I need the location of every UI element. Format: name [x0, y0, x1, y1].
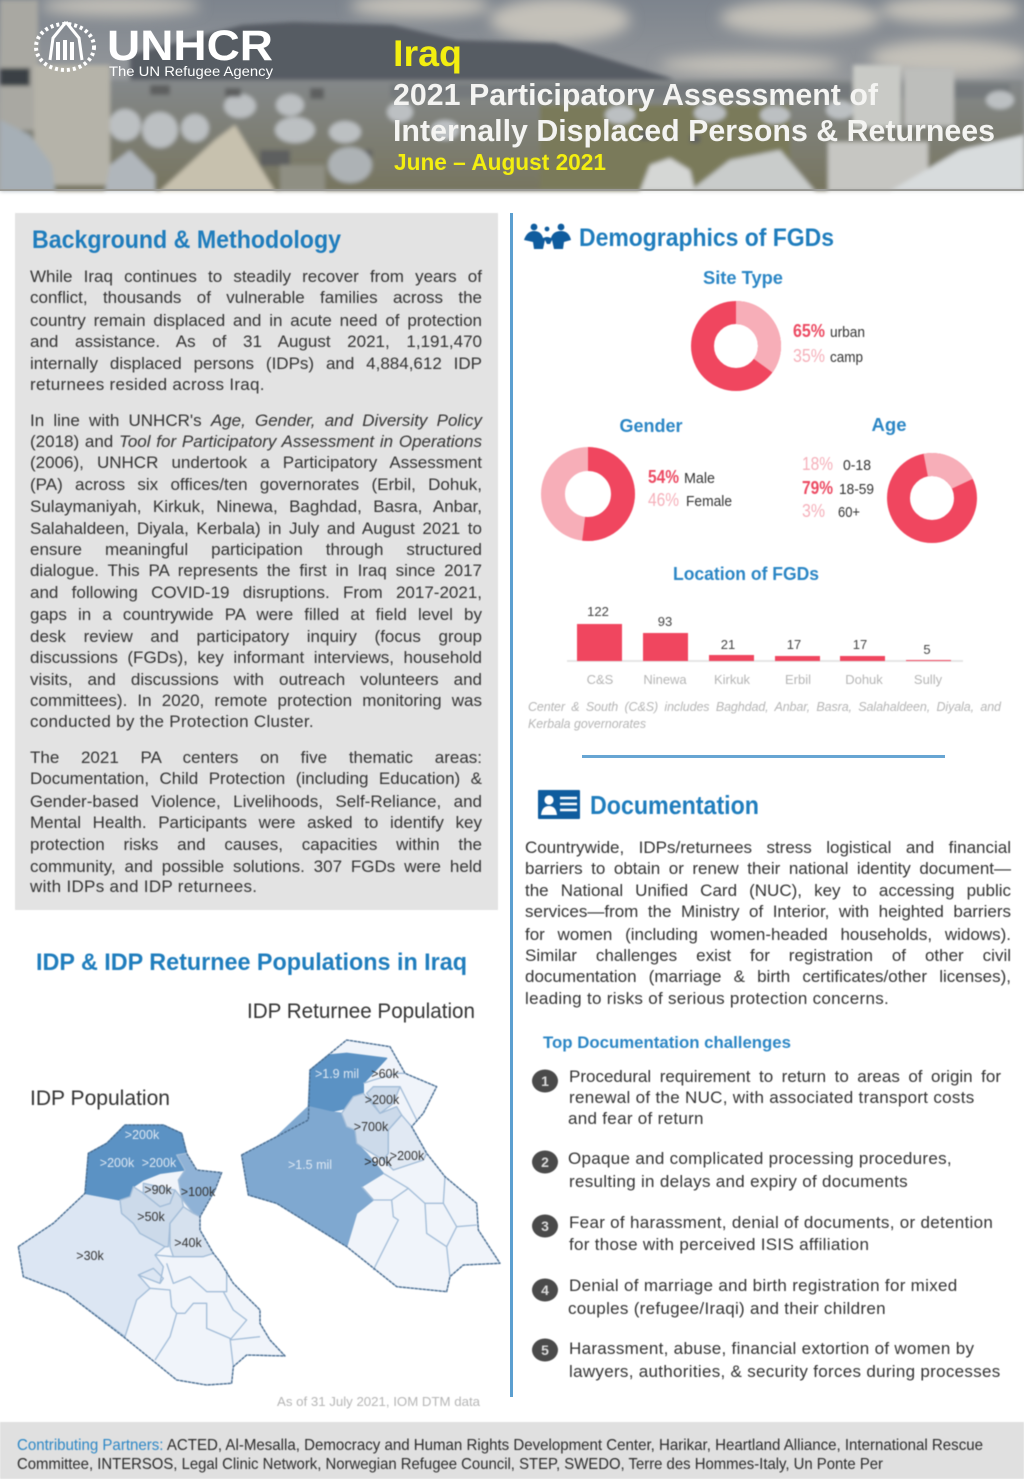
map labels: >200k: [142, 1156, 177, 1170]
panel: demographics of FGDs: [523, 222, 1002, 731]
panel: documentation: [524, 789, 1012, 1382]
list item 1: renewal of the NUC, with associated transport costs: [569, 1088, 975, 1107]
list item 3: for those with perceived ISIS affiliation: [569, 1235, 869, 1254]
horizontal divider: [582, 755, 945, 758]
text block: background paragraph two: and following COVID-19 disruptions. From 2017-2021,: [30, 583, 482, 602]
chart: site type donut: [702, 268, 865, 380]
chart: location of FGDs bars: Location of FGDs: [673, 564, 819, 584]
chart: site type donut: camp: [830, 349, 863, 366]
left building: [0, 0, 38, 130]
icon: UNHCR emblem: [36, 22, 94, 70]
chart note: [528, 700, 1002, 731]
text block: documentation summary: [524, 838, 1012, 1008]
text block: background paragraph two: In line with UNHCR's Age, Gender, and Diversity Policy: [30, 411, 482, 430]
chart: age donut: 18%: [802, 454, 833, 474]
map labels: >1.5 mil: [288, 1158, 332, 1172]
chart: location of FGDs bars: Erbil: [785, 672, 811, 687]
list item 1: [531, 1067, 1002, 1128]
text block: background paragraph two: dialogue. This PA represents the first in Iraq since 2017: [30, 561, 482, 580]
text block: background paragraph two: (PA) across six offices/ten governorates (Erbil, Dohuk,: [30, 475, 482, 494]
title: Iraq: [393, 33, 462, 74]
text block: background paragraph two: ensure meaningful participation through structured: [30, 540, 482, 559]
text block: documentation summary: Similar challenges exist for registration of other civil: [525, 946, 1011, 965]
icon: number 3: [531, 1214, 559, 1238]
text block: background paragraph three: community, and possible solutions. 307 FGDs were held: [30, 857, 482, 876]
icon: number 2: [531, 1150, 559, 1174]
chart: location of FGDs bars: Dohuk: [845, 672, 883, 687]
text block: background paragraph two: Salahaldeen, Diyala, Kerbala) in July and August 2021 to: [30, 519, 482, 538]
icon: number 2: 2: [541, 1154, 549, 1170]
heading: IDP populations: IDP & IDP Returnee Populations in Iraq: [36, 949, 467, 976]
chart: site type donut: 65%: [793, 321, 825, 341]
text block: background paragraph one: country remain displaced and in acute need of protection: [30, 311, 482, 330]
source note: As of 31 July 2021, IOM DTM data: [277, 1395, 480, 1409]
icon: people group: [524, 224, 571, 249]
chart: site type donut: Site Type: [703, 268, 783, 288]
map labels: >50k: [137, 1210, 165, 1224]
heading: top documentation challenges: Top Documentation challenges: [543, 1033, 791, 1052]
heading: demographics: Demographics of FGDs: [579, 224, 834, 252]
text block: background paragraph two: gaps in a countrywide PA were filled at field level by: [30, 605, 482, 624]
chart: age donut: Age: [872, 415, 906, 435]
list item 3: Fear of harassment, denial of documents, or detention: [569, 1213, 993, 1232]
chart: gender donut: 46%: [648, 490, 679, 510]
heading: background and methodology: Background & Methodology: [32, 226, 341, 254]
chart: location of FGDs bars: 122: [587, 604, 609, 619]
chart: gender donut: Gender: [620, 416, 682, 436]
icon: ID card: [537, 789, 581, 820]
chart: location of FGDs bars: Kirkuk: [714, 672, 751, 687]
text block: background paragraph one: While Iraq continues to steadily recover from years of: [30, 267, 482, 286]
map labels: >30k: [76, 1249, 104, 1263]
list item 5: lawyers, authorities, & security forces during processes: [569, 1362, 1001, 1381]
footer: contributing partners: [0, 1422, 1024, 1479]
chart: age donut: [802, 415, 966, 532]
text block: background paragraph three: The 2021 PA centers on five thematic areas:: [30, 748, 482, 767]
list item 2: resulting in delays and expiry of documents: [569, 1172, 908, 1191]
text block: background paragraph three: with IDPs and IDP returnees.: [30, 877, 257, 896]
header banner photo: [0, 0, 1024, 194]
text block: background paragraph one: [30, 267, 483, 394]
chart: gender donut: Male: [684, 470, 715, 487]
icon: number 4: 4: [541, 1282, 549, 1298]
text block: background paragraph two: discussions (FGDs), key informant interviews, household: [30, 648, 482, 667]
footer: contributing partners: Committee, INTERSOS, Legal Clinic Network, Norwegian Refugee Council, STEP, SWEDO, Terre des Hommes-Italy, Un Ponte Per: [17, 1456, 884, 1473]
list item 2: Opaque and complicated processing procedures,: [568, 1149, 952, 1168]
list item 1: Procedural requirement to return to areas of origin for: [569, 1067, 1001, 1086]
icon: number 3: 3: [541, 1218, 549, 1234]
text block: documentation summary: the National Unified Card (NUC), key to accessing public: [525, 881, 1011, 900]
map labels: >200k: [390, 1149, 425, 1163]
list item 4: [531, 1276, 958, 1318]
map labels: >700k: [354, 1120, 389, 1134]
text block: background paragraph one: conflict, thousands of vulnerable families across the: [30, 288, 482, 307]
chart: gender donut: Female: [686, 493, 732, 510]
text block: background paragraph two: (2018) and Tool for Participatory Assessment in Operations: [30, 432, 482, 451]
text block: documentation summary: leading to risks of serious protection concerns.: [525, 989, 889, 1008]
chart: location of FGDs bars: 17: [853, 637, 867, 652]
list item 5: Harassment, abuse, financial extortion of women by: [569, 1339, 974, 1358]
map labels: >60k: [371, 1067, 399, 1081]
text block: background paragraph three: [30, 748, 482, 896]
icon: number 5: [531, 1338, 559, 1362]
list item 1: and fear of return: [568, 1109, 704, 1128]
title: 2021 Participatory Assessment of: [393, 77, 879, 112]
title: June – August 2021: [394, 149, 606, 175]
chart: age donut: 0-18: [843, 457, 871, 474]
map labels: >90k: [364, 1155, 392, 1169]
map labels: [76, 1067, 425, 1263]
text block: background paragraph two: visits, and discussions with outreach volunteers and: [30, 670, 482, 689]
map labels: >200k: [365, 1093, 400, 1107]
chart: age donut: 60+: [838, 504, 860, 521]
title: [393, 33, 995, 175]
icon: number 1: 1: [541, 1073, 549, 1089]
text block: background paragraph one: returnees resided across Iraq.: [30, 375, 265, 394]
text block: background paragraph three: Gender-based Violence, Livelihoods, Self-Reliance, and: [30, 792, 482, 811]
text block: documentation summary: services—from the Ministry of Interior, with heighted barriers: [525, 902, 1011, 921]
right tents: [640, 158, 695, 191]
chart note: Kerbala governorates: [528, 717, 646, 731]
text block: background paragraph two: (2006), UNHCR undertook a Participatory Assessment: [30, 453, 482, 472]
water tanks: [853, 65, 901, 127]
logo: UNHCR: UNHCR: [107, 22, 273, 70]
text block: background paragraph two: conducted by the Protection Cluster.: [30, 712, 314, 731]
text block: background paragraph two: committees). In 2020, remote protection monitoring was: [30, 691, 482, 710]
list item 4: Denial of marriage and birth registration for mixed: [569, 1276, 958, 1295]
chart: location of FGDs bars: Sully: [914, 672, 943, 687]
vertical divider: [510, 213, 513, 1397]
heading: documentation: Documentation: [590, 790, 759, 820]
icon: number 4: [531, 1278, 559, 1302]
title: Internally Displaced Persons & Returnees: [393, 113, 995, 148]
map: IDP population: [18, 1125, 285, 1385]
label: IDP population: IDP Population: [30, 1087, 170, 1110]
text block: background paragraph three: Documentation, Child Protection (including Education) &: [30, 769, 482, 788]
map labels: >90k: [144, 1183, 172, 1197]
chart: gender donut: [553, 416, 732, 529]
chart: location of FGDs bars: C&S: [587, 672, 614, 687]
text block: background paragraph two: desk review and participatory inquiry (focus group: [30, 627, 482, 646]
text block: background paragraph two: [30, 411, 484, 732]
map labels: >200k: [100, 1156, 135, 1170]
chart: location of FGDs bars: Ninewa: [643, 672, 687, 687]
chart: site type donut: urban: [830, 324, 865, 341]
text block: background paragraph three: Mental Health. Participants were asked to identify key: [30, 813, 482, 832]
chart: gender donut: 54%: [648, 467, 679, 487]
tents: [109, 91, 1014, 148]
text block: documentation summary: documentation (marriage & birth certificates/other licenses),: [525, 967, 1011, 986]
label: IDP returnee population: IDP Returnee Population: [247, 1000, 475, 1023]
chart note: Center & South (C&S) includes Baghdad, Anbar, Basra, Salahaldeen, Diyala, and: [528, 700, 1002, 714]
icon: number 1: [531, 1068, 559, 1094]
text block: background paragraph one: and assistance. As of 31 August 2021, 1,191,470: [30, 332, 482, 351]
chart: location of FGDs bars: 21: [721, 637, 735, 652]
chart: age donut: 3%: [802, 501, 825, 521]
chart: site type donut: 35%: [793, 346, 825, 366]
panel: background and methodology: [15, 213, 498, 910]
text block: documentation summary: Countrywide, IDPs/returnees stress logistical and financial: [525, 838, 1011, 857]
chart: age donut: 18-59: [839, 481, 874, 498]
chart: location of FGDs bars: [567, 564, 963, 687]
text block: documentation summary: barriers to obtain or renew their national identity document—: [525, 859, 1011, 878]
chart: age donut: 79%: [802, 478, 833, 498]
list item 4: couples (refugee/Iraqi) and their children: [568, 1299, 886, 1318]
text block: background paragraph two: Sulaymaniyah, Kirkuk, Ninewa, Baghdad, Basra, Anbar,: [30, 497, 482, 516]
list item 5: [531, 1338, 1001, 1382]
map labels: >100k: [181, 1185, 216, 1199]
map labels: >200k: [125, 1128, 160, 1142]
panel: IDP populations maps: [17, 949, 502, 1409]
chart: location of FGDs bars: 17: [787, 637, 801, 652]
list item 2: [531, 1149, 952, 1192]
map: IDP returnee population: [242, 1040, 500, 1292]
chart: location of FGDs bars: 93: [658, 614, 672, 629]
text block: background paragraph one: internally displaced persons (IDPs) and 4,884,612 IDP: [30, 354, 482, 373]
logo: UNHCR: [36, 22, 273, 79]
icon: number 5: 5: [541, 1342, 549, 1358]
text block: documentation summary: for women (including women-headed households, widows).: [525, 925, 1011, 944]
list item 3: [531, 1213, 993, 1254]
map labels: >1.9 mil: [315, 1067, 359, 1081]
footer: contributing partners: Contributing Partners: ACTED, Al-Mesalla, Democracy and Human Rights Development Center, Harikar, Heartland Alliance, International Rescue: [17, 1437, 983, 1454]
logo: UNHCR: The UN Refugee Agency: [109, 63, 273, 79]
text block: background paragraph three: protection risks and causes, capacities within the: [30, 835, 482, 854]
chart: location of FGDs bars: 5: [923, 642, 931, 657]
map labels: >40k: [174, 1236, 202, 1250]
